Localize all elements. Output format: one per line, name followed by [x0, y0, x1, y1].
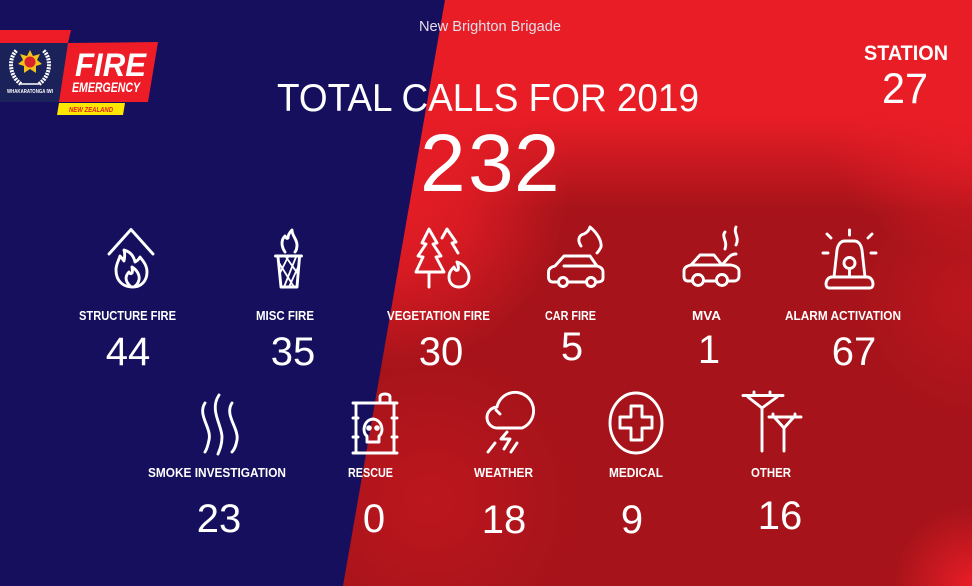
stat: MVA: [684, 227, 739, 372]
station number: 27: [882, 65, 928, 113]
label: ALARM ACTIVATION: [785, 309, 901, 323]
stat: medical: [609, 393, 663, 542]
stat: structure fire: [79, 230, 176, 374]
logo text: Fire: FIRE: [75, 47, 148, 83]
label: RESCUE: [348, 466, 393, 480]
title: TOTAL CALLS FOR 2019: [277, 77, 699, 120]
stat: rescue: [348, 394, 397, 541]
stat: vegetation fire: [387, 229, 490, 374]
count: 5: [561, 325, 583, 369]
stat: misc fire: [256, 230, 315, 374]
icon: storm cloud: [487, 392, 534, 452]
count: 44: [106, 330, 150, 374]
icon: house on fire: [109, 230, 153, 287]
logo text: Emergency: EMERGENCY: [72, 79, 141, 95]
count: 16: [758, 494, 802, 538]
label: CAR FIRE: [545, 309, 596, 323]
station label: STATION: [864, 42, 948, 65]
label: OTHER: [751, 466, 791, 480]
stat: alarm activation: [785, 230, 901, 374]
count: 35: [271, 330, 315, 374]
brigade name: New Brighton Brigade: [419, 19, 561, 35]
icon: trees and flame: [416, 229, 469, 287]
station block: [864, 42, 948, 113]
stat: car fire: [545, 227, 603, 369]
count: 1: [698, 328, 720, 372]
logo emblem: [11, 50, 49, 84]
logo: Fire and Emergency New Zealand: [0, 30, 158, 115]
icon: crashed car with smoke: [684, 227, 739, 286]
icon: smoke waves: [203, 395, 237, 454]
icon: hazard barrel with skull: [353, 394, 397, 453]
count: 23: [197, 497, 241, 541]
label: WEATHER: [474, 466, 533, 480]
count: 0: [363, 497, 385, 541]
label: STRUCTURE FIRE: [79, 309, 176, 323]
label: SMOKE INVESTIGATION: [148, 466, 286, 480]
icon: siren light: [823, 230, 876, 288]
label: VEGETATION FIRE: [387, 309, 490, 323]
label: MVA: [692, 309, 721, 323]
stat: other: [743, 392, 802, 538]
logo text: Whakaratonga Iwi: WHAKARATONGA IWI: [7, 89, 53, 95]
count: 67: [832, 330, 876, 374]
stat: weather: [474, 392, 534, 542]
label: MEDICAL: [609, 466, 663, 480]
count: 18: [482, 498, 526, 542]
stat: smoke investigation: [148, 395, 286, 541]
icon: car with flame: [548, 227, 603, 286]
icon: power poles: [743, 392, 801, 451]
icon: burning bin: [276, 230, 302, 287]
icon: medical cross: [610, 393, 662, 453]
background: red diagonal panel: [343, 0, 972, 586]
count: 9: [621, 498, 643, 542]
logo text: New Zealand: NEW ZEALAND: [69, 105, 113, 114]
total calls number: 232: [420, 118, 560, 209]
count: 30: [419, 330, 463, 374]
label: MISC FIRE: [256, 309, 314, 323]
